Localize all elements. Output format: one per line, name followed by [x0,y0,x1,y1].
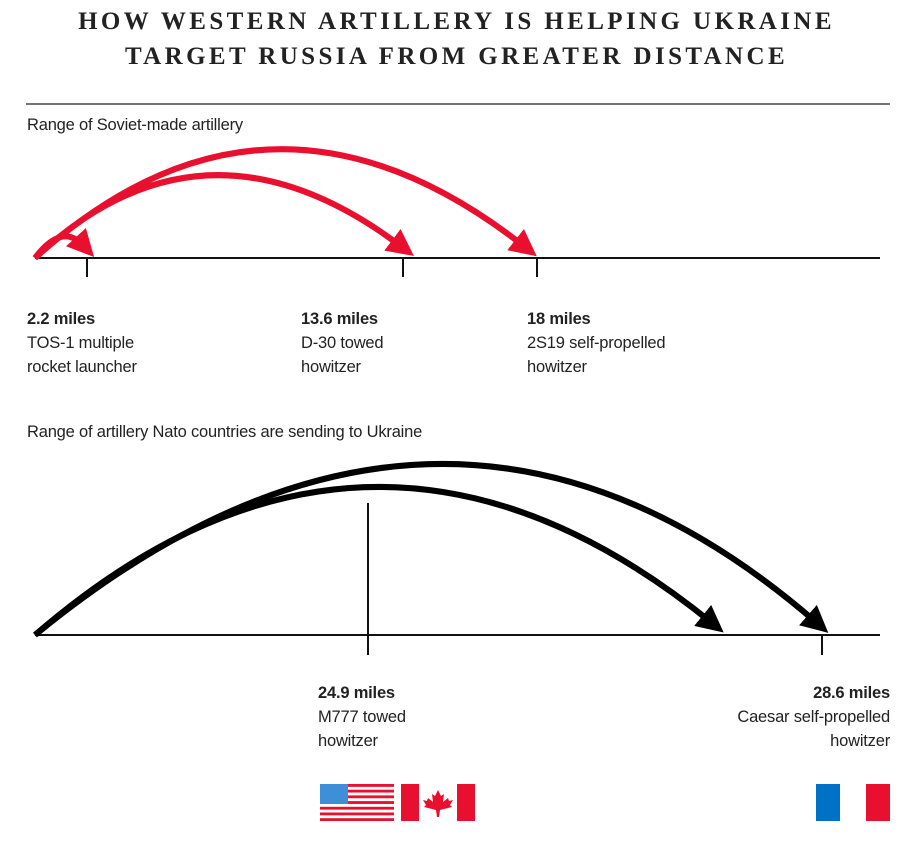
flag: USA [320,784,394,821]
label: 2S19: 2S19 self-propelled [527,334,665,352]
label: M777: M777 towed [318,708,406,726]
label: TOS-1: TOS-1 multiple [27,334,134,352]
arrow: Caesar [35,464,817,635]
flag: France [816,784,890,821]
title [78,8,835,70]
label: M777: howitzer [318,732,378,750]
label: 2S19: howitzer [527,358,587,376]
arrow: TOS-1 [35,149,525,258]
label: Caesar [737,684,890,750]
arrow: 2S19 [35,149,525,258]
label: Caesar: 28.6 miles [813,684,890,702]
label: M777 [318,684,406,750]
label: Caesar: howitzer [830,732,890,750]
label: Caesar: Caesar self-propelled [737,708,890,726]
label: M777: 24.9 miles [318,684,395,702]
label: TOS-1 [27,310,137,376]
arrow: M777 [35,464,817,635]
section heading: nato: Range of artillery Nato countries are sending to Ukraine [27,423,422,441]
label: D-30: D-30 towed [301,334,383,352]
label: TOS-1: rocket launcher [27,358,137,376]
title: HOW WESTERN ARTILLERY IS HELPING UKRAINE [78,8,835,35]
label: 2S19 [527,310,665,376]
section heading: soviet: Range of Soviet-made artillery [27,116,243,134]
title: TARGET RUSSIA FROM GREATER DISTANCE [125,43,788,70]
label: D-30 [301,310,383,376]
label: TOS-1: 2.2 miles [27,310,95,328]
flag: Canada [401,784,475,821]
arrow: D-30 [35,175,402,258]
label: D-30: 13.6 miles [301,310,378,328]
label: D-30: howitzer [301,358,361,376]
label: 2S19: 18 miles [527,310,591,328]
